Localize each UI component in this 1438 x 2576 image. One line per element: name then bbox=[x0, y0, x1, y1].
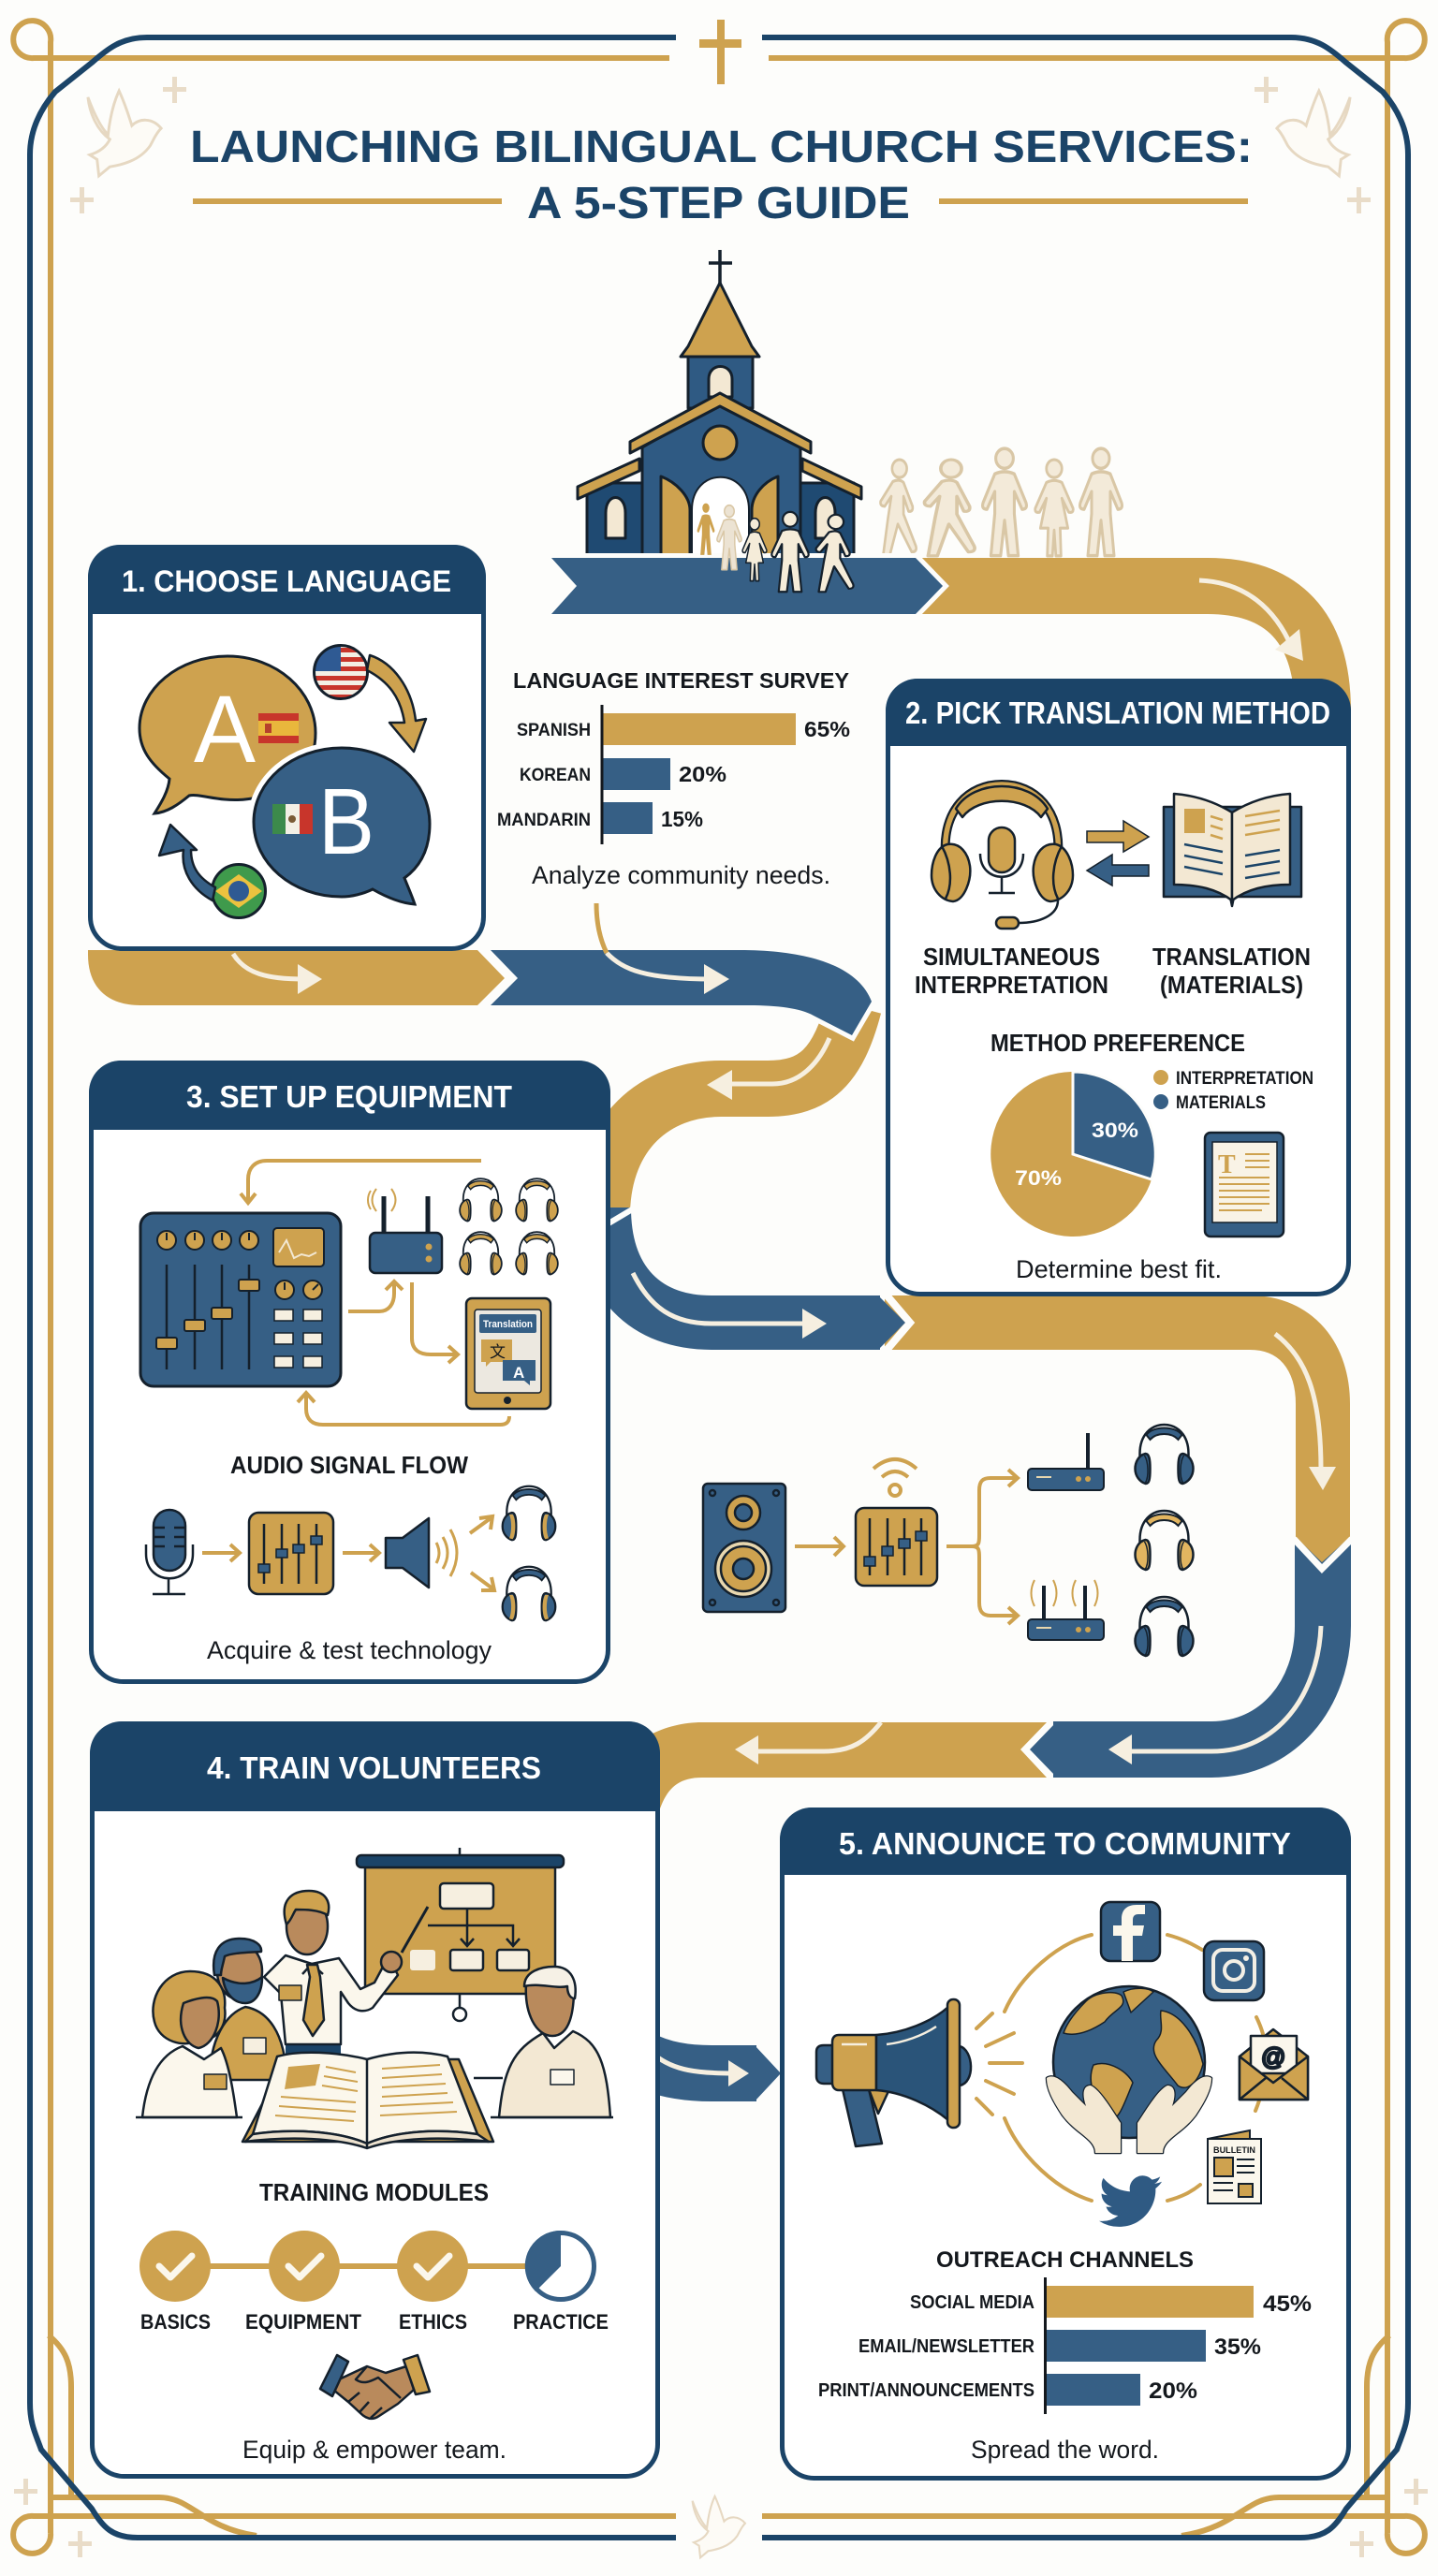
icon: translation tablet: 文 bbox=[490, 1343, 506, 1361]
icon: wifi mixer tile bbox=[856, 1459, 937, 1586]
caption: analyze community needs: Analyze community needs. bbox=[532, 861, 830, 889]
ribbon: gold right side bend bbox=[885, 1323, 1352, 1569]
chart: method preference pie: INTERPRETATION bbox=[1176, 1069, 1313, 1089]
arrow: tablet to mixer bbox=[298, 1393, 509, 1425]
chart: method preference pie: 30% bbox=[1092, 1119, 1138, 1142]
icon: handshake bbox=[320, 2355, 430, 2419]
family entering church bbox=[697, 504, 854, 592]
arrow: signal back to mixer bbox=[241, 1161, 481, 1203]
progress tracker: training modules: PRACTICE bbox=[513, 2310, 609, 2334]
label: training modules: TRAINING MODULES bbox=[259, 2178, 489, 2206]
chart: method preference pie: METHOD PREFERENCE bbox=[990, 1029, 1245, 1057]
ribbon: blue banner bbox=[551, 558, 943, 614]
chart: outreach channels: 20% bbox=[1149, 2378, 1197, 2404]
ribbon: blue below step 3 bbox=[604, 1206, 910, 1354]
chart: method preference pie bbox=[990, 1029, 1313, 1237]
chart: outreach channels: PRINT/ANNOUNCEMENTS bbox=[818, 2380, 1034, 2401]
label: translation materials bbox=[1152, 943, 1311, 999]
icon: loudspeaker bbox=[703, 1484, 785, 1612]
illustration: projection screen bbox=[357, 1848, 564, 2021]
illustration: curly-haired volunteer bbox=[142, 1971, 237, 2117]
icon: audio mixer bbox=[140, 1213, 341, 1386]
diagram: speaker to wireless headsets bbox=[703, 1425, 1193, 1656]
panel: step 4 train volunteers bbox=[90, 1721, 660, 2477]
label: simultaneous interpretation: INTERPRETATION bbox=[915, 971, 1108, 999]
arrow: to interpretation bbox=[1087, 855, 1149, 886]
arrow: blue curved bbox=[159, 825, 215, 900]
icons: navy headphones bbox=[503, 1486, 555, 1620]
icon: speech bubble A bbox=[139, 656, 315, 813]
icon: email envelope: @ bbox=[1261, 2042, 1285, 2071]
chart: language interest survey: SPANISH bbox=[517, 721, 591, 740]
caption: equip and empower team: Equip & empower team. bbox=[242, 2436, 506, 2464]
icon: church bbox=[578, 250, 861, 568]
ribbon: blue down to gold lower bend bbox=[1030, 1540, 1323, 1778]
chart: method preference pie: MATERIALS bbox=[1176, 1093, 1266, 1113]
arrow: speaker to mixer bbox=[795, 1537, 844, 1556]
progress tracker: training modules: EQUIPMENT bbox=[245, 2310, 362, 2334]
queue of people bbox=[880, 448, 1122, 556]
icon: speech bubble B bbox=[254, 748, 430, 904]
icon: speech bubble A: A bbox=[194, 676, 256, 783]
panel: step 5 announce to community bbox=[780, 1808, 1351, 2479]
icon: gold mixer tile bbox=[249, 1513, 333, 1594]
icon: translation tablet bbox=[466, 1298, 550, 1409]
progress tracker: training modules bbox=[139, 2231, 609, 2334]
icon: router bottom bbox=[1028, 1580, 1104, 1640]
progress tracker: training modules: ETHICS bbox=[399, 2310, 467, 2334]
icon: headset with microphone bbox=[932, 784, 1073, 929]
chart: outreach channels: 45% bbox=[1263, 2291, 1312, 2317]
chart: language interest survey: KOREAN bbox=[520, 766, 591, 785]
chart: language interest survey: 20% bbox=[679, 762, 726, 786]
chart: outreach channels: OUTREACH CHANNELS bbox=[936, 2247, 1194, 2273]
icons: three headphones bbox=[1135, 1425, 1193, 1656]
icon: translation tablet: Translation bbox=[483, 1319, 533, 1330]
icon: top cross bbox=[699, 20, 741, 84]
caption: spread the word: Spread the word. bbox=[971, 2436, 1159, 2464]
label: translation materials: TRANSLATION bbox=[1152, 943, 1311, 971]
heading: step 3: 3. SET UP EQUIPMENT bbox=[186, 1079, 512, 1114]
chart: outreach channels: SOCIAL MEDIA bbox=[910, 2292, 1034, 2313]
chart: language interest survey: 15% bbox=[661, 807, 703, 831]
caption: determine best fit: Determine best fit. bbox=[1016, 1255, 1222, 1283]
label: translation materials: (MATERIALS) bbox=[1160, 971, 1303, 999]
icon: microphone bbox=[146, 1510, 193, 1594]
arrow: gold curved bbox=[367, 655, 426, 752]
arrow: mixer to speaker bbox=[343, 1544, 379, 1561]
arrows: branching to routers bbox=[946, 1470, 1018, 1624]
icon: wireless router bbox=[368, 1189, 442, 1273]
label: simultaneous interpretation bbox=[915, 943, 1108, 999]
illustration: open training manual bbox=[242, 2053, 493, 2148]
chart: outreach channels: 35% bbox=[1214, 2334, 1261, 2360]
panel: step 3 set up equipment bbox=[89, 1061, 610, 1681]
chart: language interest survey bbox=[497, 668, 850, 844]
icon: email envelope bbox=[1240, 2029, 1308, 2100]
caption: acquire and test technology: Acquire & test technology bbox=[207, 1636, 492, 1664]
arrow: to materials bbox=[1087, 821, 1149, 852]
progress tracker: training modules: BASICS bbox=[140, 2310, 211, 2334]
icon: globe in hands bbox=[1047, 1986, 1211, 2153]
icon: megaphone bbox=[816, 1999, 971, 2146]
ring connecting outreach channels bbox=[1005, 1935, 1265, 2201]
arrow: mixer to router bbox=[348, 1281, 403, 1311]
icon: Brazil flag circle bbox=[212, 865, 266, 917]
arrows: speaker to headphones bbox=[470, 1516, 494, 1590]
ribbon: blue to step 5 bbox=[599, 2012, 781, 2101]
icon: translation tablet: A bbox=[513, 1364, 524, 1382]
illustration: grey-haired volunteer bbox=[136, 1967, 613, 2117]
icon: speaker cone bbox=[386, 1518, 457, 1588]
chart: language interest survey: MANDARIN bbox=[497, 811, 591, 830]
illustration: instructor bbox=[264, 1891, 428, 2061]
panel: step 2 pick translation method bbox=[886, 679, 1351, 1294]
icon: speech bubble B: B bbox=[318, 769, 374, 874]
label: audio signal flow: AUDIO SIGNAL FLOW bbox=[230, 1451, 468, 1479]
illustration: bearded volunteer bbox=[210, 1939, 286, 2080]
ribbon: gold to step 4 bbox=[618, 1722, 1047, 1825]
chart: outreach channels bbox=[818, 2247, 1312, 2414]
heading: step 2: 2. PICK TRANSLATION METHOD bbox=[905, 695, 1330, 730]
chart: outreach channels: EMAIL/NEWSLETTER bbox=[858, 2336, 1035, 2357]
label: simultaneous interpretation: SIMULTANEOUS bbox=[923, 943, 1100, 971]
icon: Twitter bird bbox=[1099, 2175, 1162, 2227]
icon: US flag circle bbox=[314, 645, 368, 699]
title: A 5-STEP GUIDE bbox=[527, 179, 910, 228]
arrow: mic to mixer bbox=[202, 1544, 240, 1561]
chart: language interest survey: LANGUAGE INTEREST SURVEY bbox=[513, 668, 849, 693]
chart: language interest survey: 65% bbox=[804, 717, 850, 741]
chart: method preference pie: 70% bbox=[1015, 1166, 1062, 1190]
heading: step 1: 1. CHOOSE LANGUAGE bbox=[122, 564, 451, 598]
icon: bulletin newsletter: BULLETIN bbox=[1213, 2145, 1255, 2156]
icons: four headphones bbox=[460, 1178, 558, 1275]
heading: step 4: 4. TRAIN VOLUNTEERS bbox=[207, 1750, 541, 1785]
ribbon: gold to step 2 bbox=[922, 580, 1323, 711]
heading: step 5: 5. ANNOUNCE TO COMMUNITY bbox=[839, 1826, 1291, 1861]
icon: open book bbox=[1164, 794, 1301, 906]
icon: Instagram bbox=[1204, 1941, 1264, 2000]
icon: router top bbox=[1028, 1433, 1104, 1490]
icon: bulletin newsletter bbox=[1208, 2130, 1261, 2203]
ribbon: gold and blue under step 1 bbox=[88, 899, 872, 1212]
icon: tablet with text bbox=[1205, 1133, 1284, 1237]
title bbox=[190, 123, 1253, 228]
panel: step 1 choose language bbox=[88, 545, 486, 949]
title: LAUNCHING BILINGUAL CHURCH SERVICES: bbox=[190, 123, 1253, 172]
icon: tablet with text: T bbox=[1218, 1150, 1236, 1179]
icon: Facebook bbox=[1101, 1902, 1160, 1961]
arrow: router to tablet bbox=[412, 1282, 458, 1363]
sound rays bbox=[976, 2013, 1022, 2115]
